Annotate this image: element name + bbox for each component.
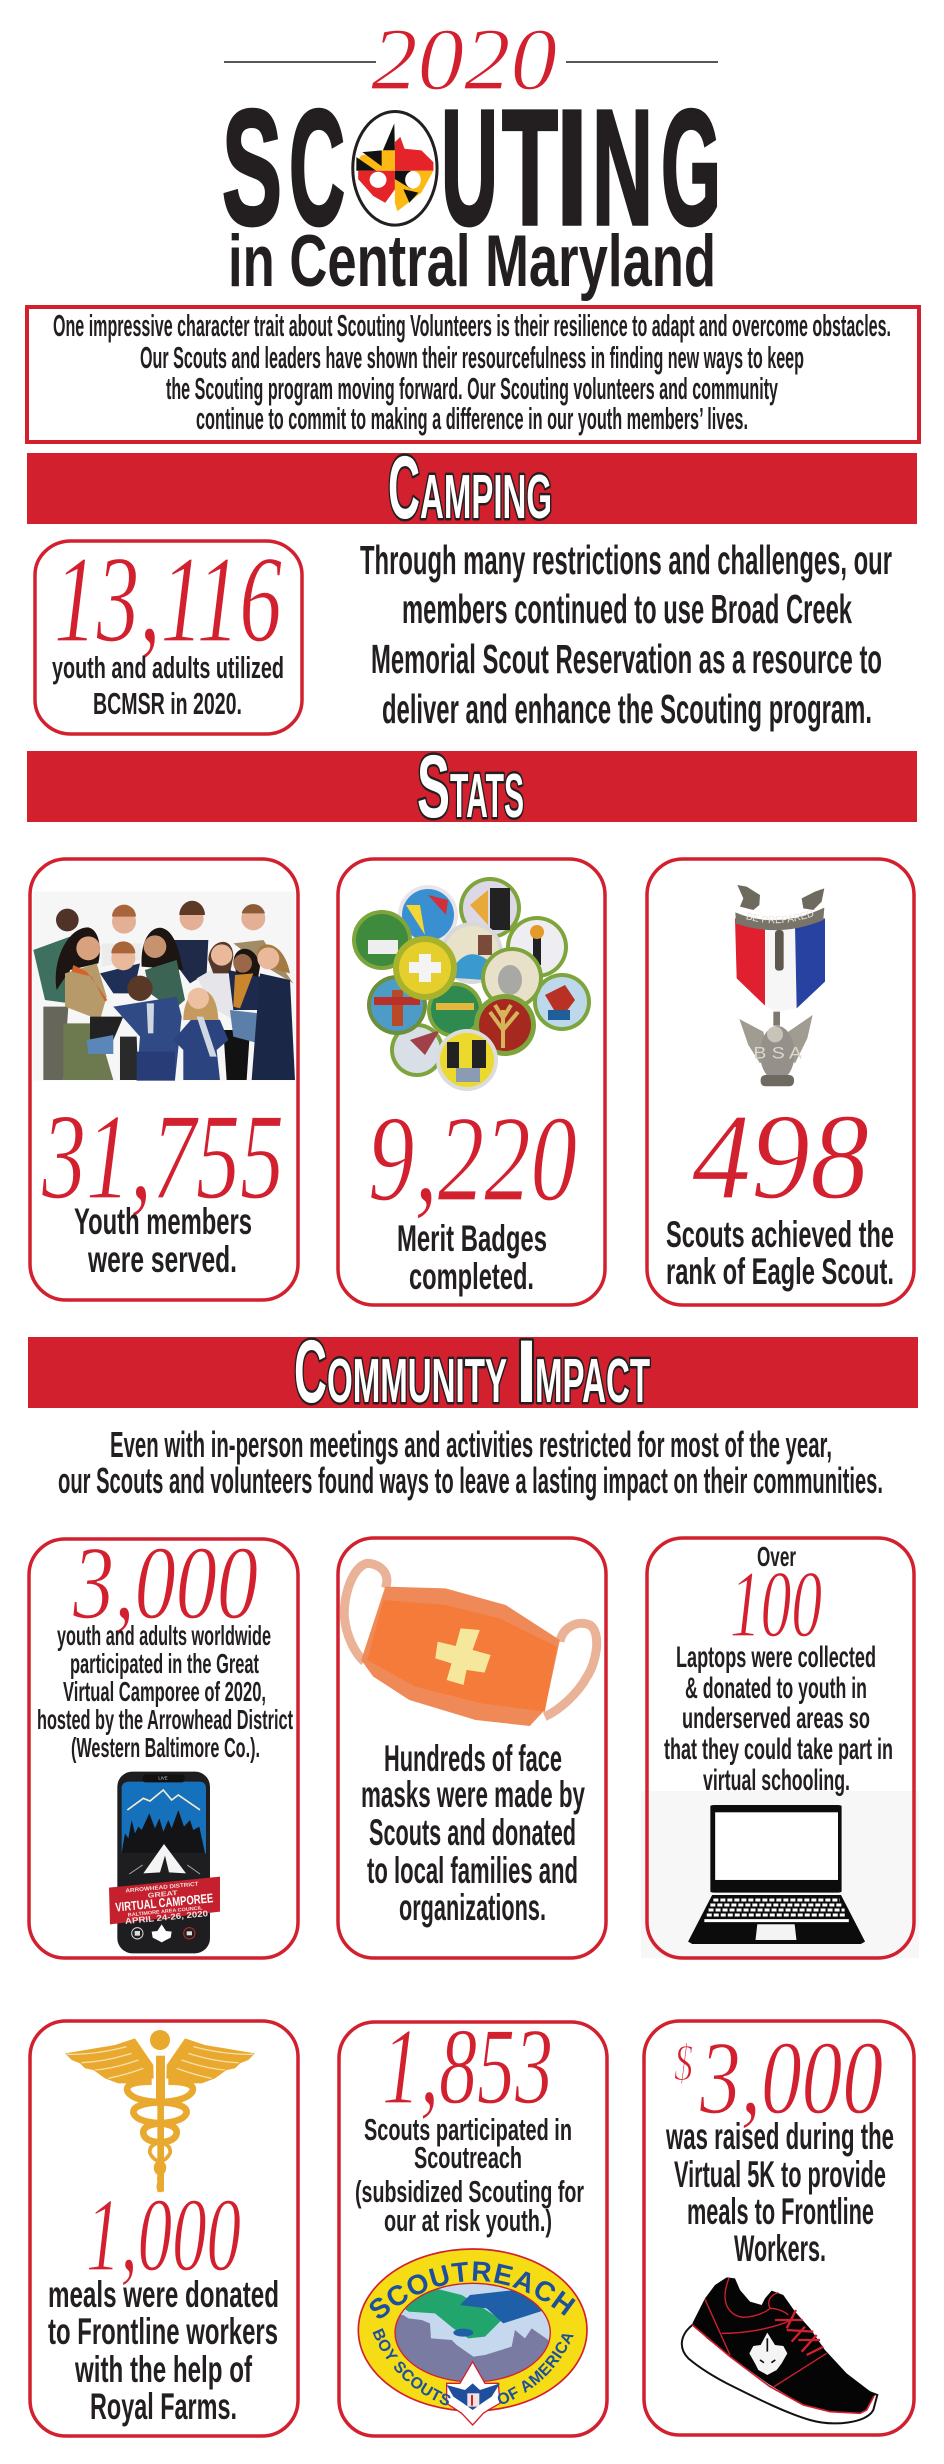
heading: Camping: C <box>388 437 420 537</box>
panel: face masks: organizations. <box>399 1887 546 1928</box>
heading: Community Impact: OMMUNITY <box>327 1347 507 1416</box>
panel: merit badges stat <box>338 859 605 1305</box>
text: G <box>661 76 721 259</box>
panel: 13,116 camping stat: 13,116 <box>54 531 282 668</box>
title: SCOUTING wordmark: N <box>592 76 653 259</box>
icon: orange face mask <box>344 1563 597 1726</box>
icon: phone with camporee logo: GREAT <box>147 1890 178 1900</box>
panel: youth members stat: were served. <box>87 1239 237 1280</box>
icon: running shoe <box>682 2277 877 2423</box>
panel: 13,116 camping stat: BCMSR in 2020. <box>93 686 242 721</box>
panel: youth members stat: 31,755 <box>41 1088 284 1225</box>
panel: Virtual 5K: $ <box>674 2035 693 2092</box>
panel: Eagle Scout stat: 498 <box>692 1088 869 1225</box>
panel: meals donated <box>30 2021 298 2436</box>
panel: face masks <box>338 1538 606 1958</box>
panel: virtual camporee <box>29 1524 298 1958</box>
panel: merit badges stat: 9,220 <box>368 1090 577 1227</box>
panel: virtual camporee: 3,000 <box>72 1524 258 1641</box>
panel: laptops: 100 <box>730 1551 822 1657</box>
panel: meals donated: meals were donated <box>48 2274 279 2315</box>
icon: Scoutreach logo <box>358 2248 588 2426</box>
icon: phone with camporee logo: LIVE <box>158 1776 168 1781</box>
panel: laptops <box>641 1538 919 1958</box>
photo: group of Scouts <box>33 892 295 1081</box>
heading: Stats: S <box>417 736 450 836</box>
panel: youth members stat: Youth members <box>74 1201 252 1242</box>
panel: virtual camporee: youth and adults worldwide <box>57 1620 271 1651</box>
heading: Community Impact: I <box>516 1321 537 1421</box>
panel: merit badges stat: completed. <box>409 1256 534 1297</box>
panel: virtual camporee: hosted by the Arrowhead District <box>37 1704 293 1735</box>
title: SCOUTING wordmark: U <box>441 76 498 259</box>
heading: Community Impact: C <box>294 1321 327 1421</box>
panel: Virtual 5K: 3,000 <box>699 2019 883 2136</box>
panel: Scoutreach <box>337 2006 609 2438</box>
panel: Scoutreach: (subsidized Scouting for <box>355 2174 584 2209</box>
icon: Scoutreach logo: OF AMERICA <box>498 2334 574 2404</box>
panel: Eagle Scout stat <box>645 857 916 1307</box>
panel: face masks: masks were made by <box>361 1774 585 1815</box>
heading: Camping: AMPING <box>420 463 552 532</box>
icon: phone with camporee logo <box>109 1772 220 1953</box>
icon: Eagle Scout medal <box>735 885 825 1086</box>
panel: Scoutreach: our at risk youth.) <box>384 2203 552 2238</box>
icon: Scoutreach logo: BOY SCOUTS <box>372 2328 450 2406</box>
panel: meals donated: to Frontline workers <box>48 2311 278 2352</box>
title: SCOUTING wordmark: C <box>289 76 345 259</box>
panel: Scoutreach: Scouts participated in <box>364 2112 572 2147</box>
panel: face masks: Hundreds of face <box>384 1738 562 1779</box>
icon: laptop <box>688 1805 865 1944</box>
panel: Scoutreach: Scoutreach <box>414 2140 522 2175</box>
heading: Community Impact: MPACT <box>535 1347 650 1416</box>
icon: phone with camporee logo: BALTIMORE AREA COUNCIL <box>128 1905 203 1918</box>
panel: meals donated: with the help of <box>74 2349 252 2390</box>
panel: Scoutreach: 1,853 <box>382 2006 553 2127</box>
icon: phone with camporee logo: APRIL 24-26, 2020 <box>125 1908 209 1926</box>
panel: laptops: virtual schooling. <box>703 1764 850 1797</box>
title: SCOUTING wordmark: S <box>222 76 282 259</box>
icon: Eagle Scout medal: B S A <box>753 1043 803 1062</box>
panel: Virtual 5K: Workers. <box>734 2228 826 2269</box>
icon: gold caduceus <box>65 2030 255 2192</box>
heading: Camping <box>27 437 917 537</box>
text block: community intro <box>58 1424 883 1501</box>
panel: virtual camporee: (Western Baltimore Co.). <box>71 1732 260 1763</box>
icon: Maryland flag in O <box>353 112 437 225</box>
heading: Stats <box>27 736 917 836</box>
icon: phone with camporee logo: VIRTUAL CAMPOREE <box>115 1891 214 1915</box>
icon: Eagle Scout medal: BE PREPARED <box>746 910 814 924</box>
panel: face masks: to local families and <box>367 1850 578 1891</box>
panel: meals donated: Royal Farms. <box>90 2386 237 2427</box>
title: SCOUTING wordmark: T <box>502 76 558 259</box>
panel: virtual camporee: Virtual Camporee of 2020, <box>63 1676 266 1707</box>
icon: Scoutreach logo: SCOUTREACH <box>370 2261 576 2318</box>
panel: face masks: Scouts and donated <box>369 1812 576 1853</box>
title: SCOUTING wordmark <box>222 76 721 259</box>
panel: youth members stat <box>30 859 298 1300</box>
panel: intro text box <box>27 307 919 442</box>
heading: Stats: TATS <box>450 762 524 831</box>
panel: meals donated: 1,000 <box>86 2176 241 2293</box>
title: 2020 with rules: 2020 <box>371 11 557 109</box>
icon: merit badge cluster <box>352 877 591 1091</box>
panel: virtual camporee: participated in the Great <box>70 1648 259 1679</box>
panel: 13,116 camping stat <box>35 531 302 734</box>
title: SCOUTING wordmark: I <box>556 76 588 259</box>
subtitle: in Central Maryland <box>228 221 716 302</box>
panel: 13,116 camping stat: youth and adults utilized <box>52 650 284 685</box>
heading: Community Impact <box>28 1321 918 1421</box>
icon: phone with camporee logo: ARROWHEAD DISTRICT <box>125 1881 199 1895</box>
panel: merit badges stat: Merit Badges <box>397 1218 547 1259</box>
text block: camping description <box>360 537 892 732</box>
panel: Virtual 5K <box>644 2019 914 2435</box>
panel: laptops: Over <box>757 1541 796 1572</box>
